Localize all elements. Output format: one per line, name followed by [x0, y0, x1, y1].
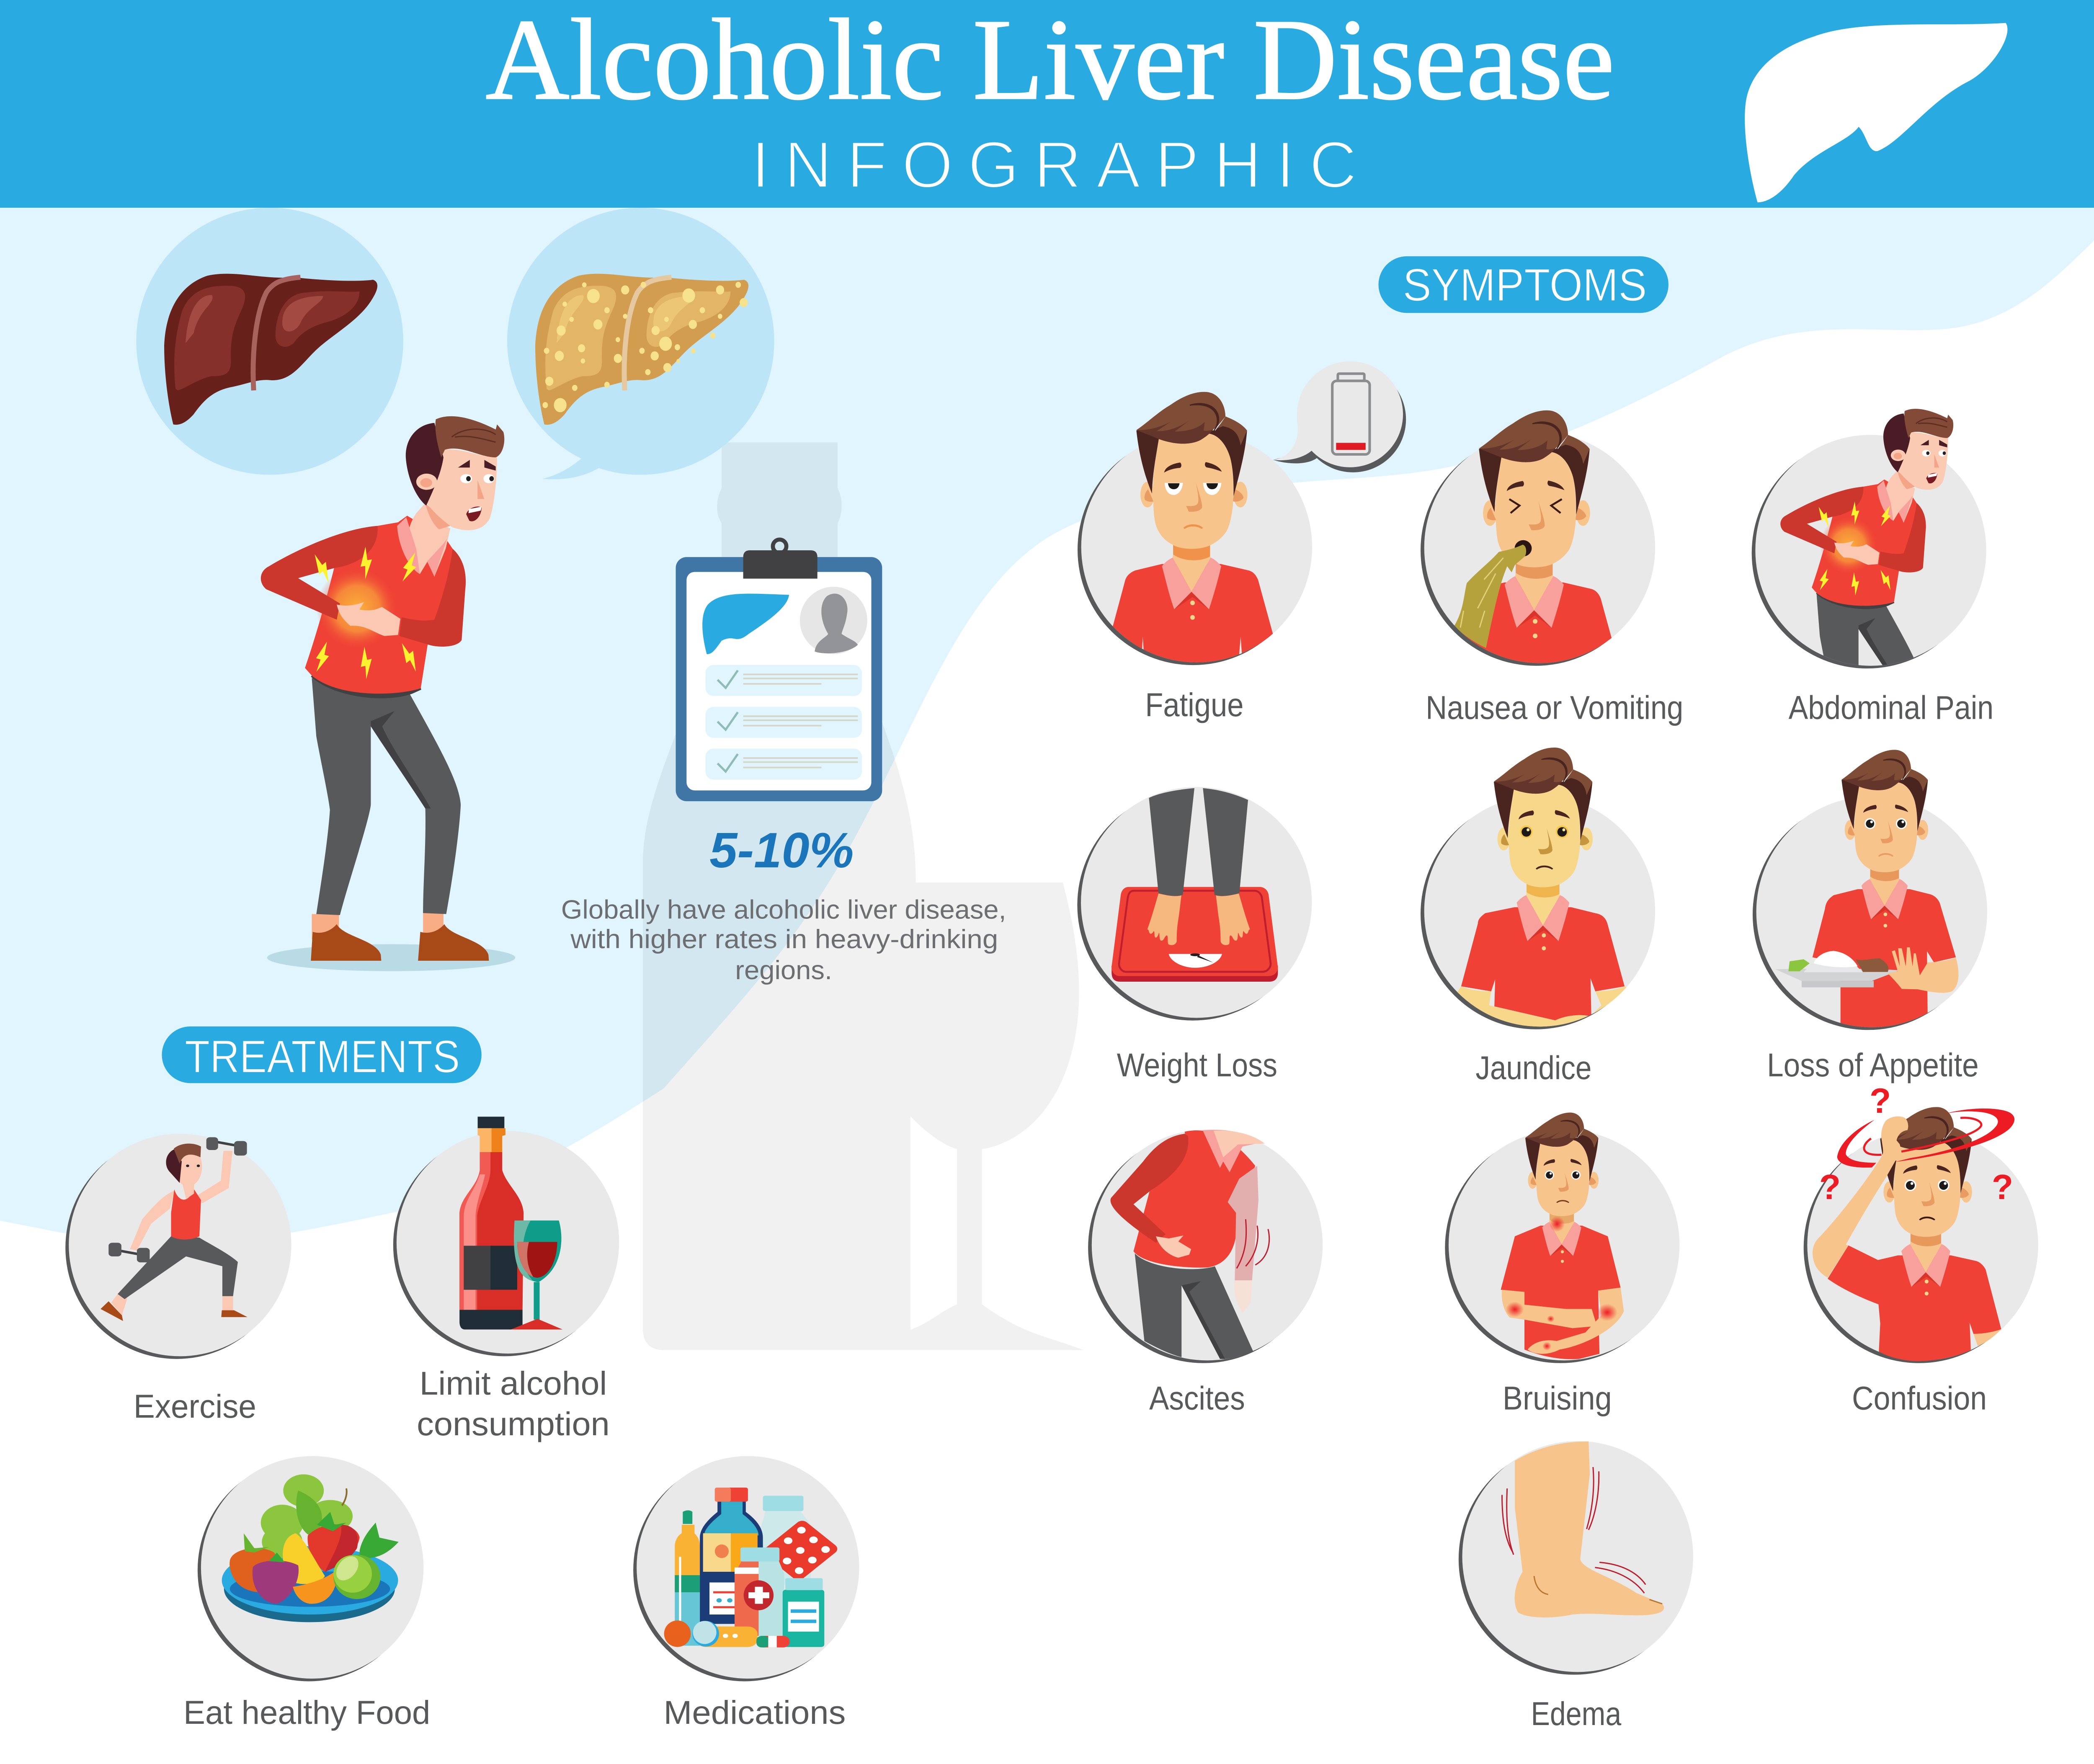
icon: low battery bubble — [1273, 361, 1406, 472]
raised arm — [1813, 1117, 1908, 1278]
symptom: weight loss — [1077, 787, 1312, 1021]
label: limit alcohol consumption: Limit alcohol — [420, 1365, 607, 1402]
label: ascites: Ascites — [1149, 1380, 1245, 1417]
icon: white liver — [1745, 23, 2007, 202]
treatment: exercise — [65, 1134, 291, 1359]
icon: healthy liver — [164, 274, 377, 425]
icon: patient — [800, 587, 867, 654]
icon: medicine bottles — [664, 1488, 840, 1648]
symptoms heading: SYMPTOMS — [1403, 260, 1647, 311]
icon: dizzy swirl — [1837, 1109, 2014, 1168]
clipboard — [676, 539, 882, 801]
label: jaundice: Jaundice — [1475, 1050, 1591, 1086]
label: fatigue: Fatigue — [1145, 686, 1243, 723]
icon: fruit plate — [222, 1474, 399, 1622]
refusing hand — [1888, 947, 1958, 993]
figure — [261, 416, 504, 961]
symptom: ascites — [1088, 1130, 1323, 1363]
main man holding abdomen — [261, 416, 515, 971]
label: abdominal pain: Abdominal Pain — [1789, 689, 1993, 726]
fatty liver bubble — [507, 208, 774, 479]
icon: wine bottle — [459, 1117, 524, 1329]
symptom: edema — [1459, 1441, 1693, 1675]
bottle and wine glass silhouette — [643, 442, 1084, 1350]
legs — [1149, 788, 1248, 896]
statistic description — [561, 895, 1006, 985]
symptom: jaundice — [1421, 748, 1655, 1032]
liver comparison — [136, 208, 774, 479]
treatment: limit alcohol — [393, 1117, 619, 1356]
label: limit alcohol consumption — [417, 1365, 610, 1442]
icon: fatty liver — [535, 274, 748, 425]
symptom: confusion — [1804, 1081, 2038, 1363]
symptom: loss of appetite — [1753, 750, 1987, 1034]
statistic description: Globally have alcoholic liver disease, — [561, 895, 1006, 924]
light blue background wave — [0, 208, 2094, 1241]
icon: plate of food — [1776, 951, 1900, 988]
header band — [0, 0, 2094, 208]
statistic: 5-10% — [709, 823, 854, 878]
symptom: nausea or vomiting — [1421, 410, 1655, 666]
label: exercise: Exercise — [134, 1388, 256, 1425]
subtitle: INFOGRAPHIC — [751, 128, 1357, 202]
symptom: abdominal pain — [1752, 409, 1986, 795]
label: limit alcohol consumption: consumption — [417, 1406, 610, 1442]
symptom: bruising — [1445, 1113, 1679, 1363]
question marks: ? — [1992, 1167, 2013, 1207]
label: confusion: Confusion — [1852, 1380, 1987, 1417]
checklist rows — [705, 665, 862, 780]
label: loss of appetite: Loss of Appetite — [1767, 1047, 1979, 1083]
statistic description: with higher rates in heavy-drinking — [570, 925, 998, 954]
label: nausea or vomiting: Nausea or Vomiting — [1426, 689, 1683, 726]
icon: wine glass — [511, 1220, 562, 1329]
question marks — [1819, 1081, 2013, 1207]
treatment: medications — [633, 1456, 859, 1681]
icon: scale — [1111, 887, 1278, 982]
treatment: healthy food — [198, 1456, 423, 1681]
label: medications: Medications — [664, 1694, 846, 1731]
label: edema: Edema — [1531, 1695, 1621, 1732]
icon: blue liver — [702, 594, 789, 654]
label: bruising: Bruising — [1503, 1380, 1612, 1417]
symptom: fatigue — [1078, 361, 1406, 689]
label: eat healthy food: Eat healthy Food — [183, 1694, 430, 1731]
question marks: ? — [1819, 1167, 1841, 1207]
healthy liver bubble — [136, 208, 403, 475]
feet — [1148, 893, 1250, 945]
label: weight loss: Weight Loss — [1117, 1047, 1277, 1083]
ground shadow — [267, 944, 515, 971]
treatments heading: TREATMENTS — [185, 1031, 460, 1082]
statistic description: regions. — [735, 956, 832, 985]
question marks: ? — [1870, 1081, 1891, 1120]
